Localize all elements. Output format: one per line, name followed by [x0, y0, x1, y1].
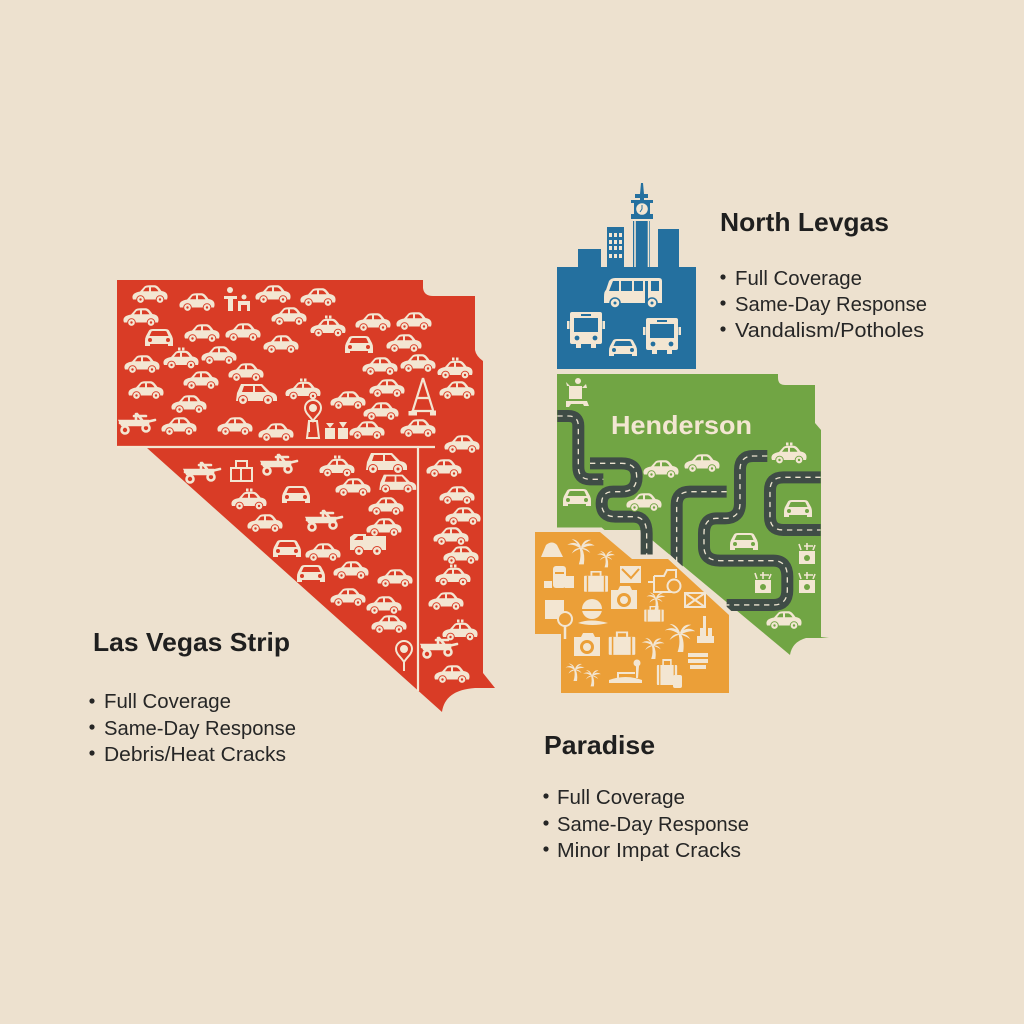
icons: scales: [755, 543, 815, 593]
icons: cars: [563, 442, 812, 629]
icon: front buses and car: [567, 312, 681, 356]
icon: luggage: [231, 461, 252, 481]
icons: suitcases: [584, 572, 682, 688]
icon: carts and trikes: [120, 414, 457, 658]
icon: box and magnifier: [545, 600, 572, 639]
icon: hat: [578, 599, 608, 625]
list: North Levgas details: [720, 268, 927, 342]
heading: Las Vegas Strip: Las Vegas Strip: [93, 627, 290, 657]
icons: palms: [566, 539, 695, 686]
icon: sand statue: [541, 542, 563, 557]
icons: cameras: [574, 570, 680, 656]
road lines: [117, 447, 435, 691]
icon: envelope bag: [620, 566, 641, 583]
icons: cars: [123, 285, 481, 683]
panel: North Levgas map: [557, 183, 696, 369]
panel: Las Vegas Strip map: [117, 280, 495, 712]
roads: [557, 416, 821, 605]
list: Las Vegas Strip details: Same-Day Response: [104, 718, 296, 740]
list: Paradise details: Minor Impat Cracks: [557, 840, 741, 862]
icon: basket: [688, 653, 708, 669]
icon: gift boxes: [325, 422, 348, 439]
icon: bus: [604, 278, 662, 308]
list: Paradise details: [543, 787, 749, 862]
list: Paradise details: Same-Day Response: [557, 814, 749, 836]
icon: map pin and monument: [305, 400, 321, 438]
icon: people: [224, 287, 250, 311]
list: North Levgas details: Full Coverage: [735, 268, 862, 290]
list: Las Vegas Strip details: [89, 691, 296, 766]
building windows: [609, 233, 622, 258]
icon: pin: [396, 641, 412, 662]
icon: robot chair: [566, 378, 589, 407]
icon: beach scene: [609, 660, 642, 683]
heading: North Levgas: North Levgas: [720, 207, 889, 237]
icon: backpack: [544, 566, 574, 588]
icon: clock tower: [631, 183, 653, 267]
list: North Levgas details: Same-Day Response: [735, 294, 927, 316]
label: Henderson: Henderson: [611, 410, 752, 440]
heading: Paradise: Paradise: [544, 730, 655, 760]
icon: guitar: [697, 616, 714, 643]
list: North Levgas details: Vandalism/Potholes: [735, 320, 924, 342]
list: Paradise details: Full Coverage: [557, 787, 685, 809]
list: Las Vegas Strip details: Full Coverage: [104, 691, 231, 713]
icon: envelope: [685, 593, 705, 607]
icon: tower: [411, 378, 436, 413]
panel: Paradise map: [535, 532, 729, 693]
panel: Henderson map: [557, 374, 829, 655]
list: Las Vegas Strip details: Debris/Heat Cracks: [104, 744, 286, 766]
